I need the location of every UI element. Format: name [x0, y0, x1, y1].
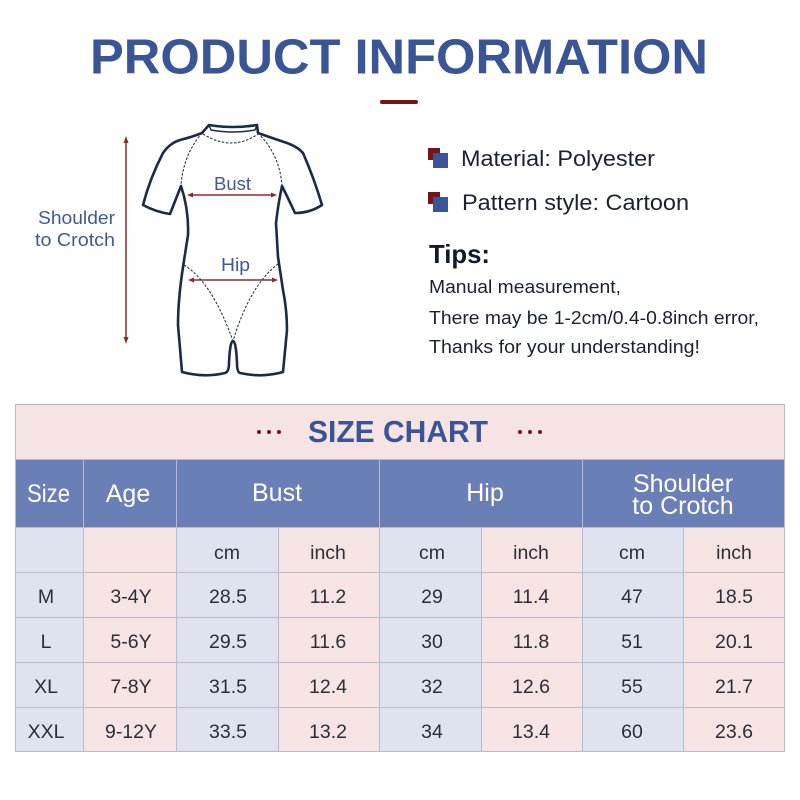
unit row: inch [716, 542, 752, 564]
header row: to Crotch [632, 492, 734, 520]
row M: 11.2 [310, 586, 346, 608]
size chart table [15, 404, 785, 752]
raglan seam dashes [181, 133, 282, 186]
garment outline [143, 125, 322, 375]
row XXL: 34 [421, 721, 443, 743]
tips text: There may be 1-2cm/0.4-0.8inch error, [429, 308, 759, 328]
unit row: inch [513, 542, 549, 564]
cell backgrounds [15, 527, 785, 752]
Hip label: Hip [221, 255, 250, 275]
row XL: 21.7 [715, 676, 753, 698]
header row: Hip [466, 479, 504, 507]
row XXL: 60 [621, 721, 643, 743]
row XXL: 9-12Y [105, 721, 157, 743]
row L: 11.8 [513, 631, 549, 653]
row L: 29.5 [209, 631, 247, 653]
row XL: 55 [621, 676, 643, 698]
unit row: cm [619, 542, 645, 564]
header row: Bust [252, 479, 302, 507]
row XXL: 33.5 [209, 721, 247, 743]
row M: M [38, 586, 54, 608]
Bust label: Bust [214, 174, 251, 194]
size chart heading: SIZE CHART [308, 414, 488, 449]
row XXL [28, 721, 753, 743]
row M: 47 [621, 586, 643, 608]
row M: 11.4 [513, 586, 549, 608]
tips text: Manual measurement, [429, 277, 621, 297]
unit row: inch [310, 542, 346, 564]
unit row [214, 542, 752, 564]
title: PRODUCT INFORMATION [90, 30, 708, 84]
row XL: 12.4 [309, 676, 347, 698]
unit row: cm [214, 542, 240, 564]
header row [15, 460, 785, 527]
row XXL: 13.2 [309, 721, 347, 743]
row L: 30 [421, 631, 443, 653]
row XL: 7-8Y [110, 676, 152, 698]
row XXL: 13.4 [512, 721, 550, 743]
row M: 18.5 [715, 586, 753, 608]
row M [38, 586, 753, 608]
row M: 3-4Y [110, 586, 152, 608]
header row: Age [106, 480, 150, 508]
row M: 28.5 [209, 586, 247, 608]
unit row: cm [419, 542, 445, 564]
row XL: 32 [421, 676, 443, 698]
row XL: 12.6 [512, 676, 550, 698]
Bust arrow [187, 192, 277, 198]
tips heading: Tips: [429, 239, 490, 269]
row XL: XL [34, 676, 58, 698]
row XXL: XXL [28, 721, 65, 743]
tips text: Thanks for your understanding! [429, 337, 700, 357]
size chart title band [15, 404, 785, 460]
bullet: material: Material: Polyester [461, 146, 656, 171]
row XXL: 23.6 [715, 721, 753, 743]
row L: 5-6Y [110, 631, 152, 653]
Hip arrow [188, 278, 278, 282]
header row: Shoulder [633, 470, 733, 498]
row L: 20.1 [715, 631, 753, 653]
dots left [257, 430, 281, 434]
title underline accent [380, 100, 418, 104]
Shoulder to Crotch label: Shoulder [38, 207, 115, 228]
Shoulder to Crotch arrow [124, 136, 128, 344]
bullet: pattern style: Pattern style: Cartoon [462, 190, 689, 215]
row M: 29 [421, 586, 443, 608]
row L: 11.6 [310, 631, 346, 653]
collar [209, 125, 257, 132]
row L [41, 631, 753, 653]
row L: 51 [621, 631, 643, 653]
icon: garment measurement diagram [35, 125, 322, 375]
dots right [518, 430, 542, 434]
header row: Size [27, 480, 70, 508]
Shoulder to Crotch label: to Crotch [35, 229, 115, 250]
row XL [34, 676, 753, 698]
row XL: 31.5 [209, 676, 247, 698]
hip seam dashes [184, 264, 278, 341]
row L: L [41, 631, 52, 653]
